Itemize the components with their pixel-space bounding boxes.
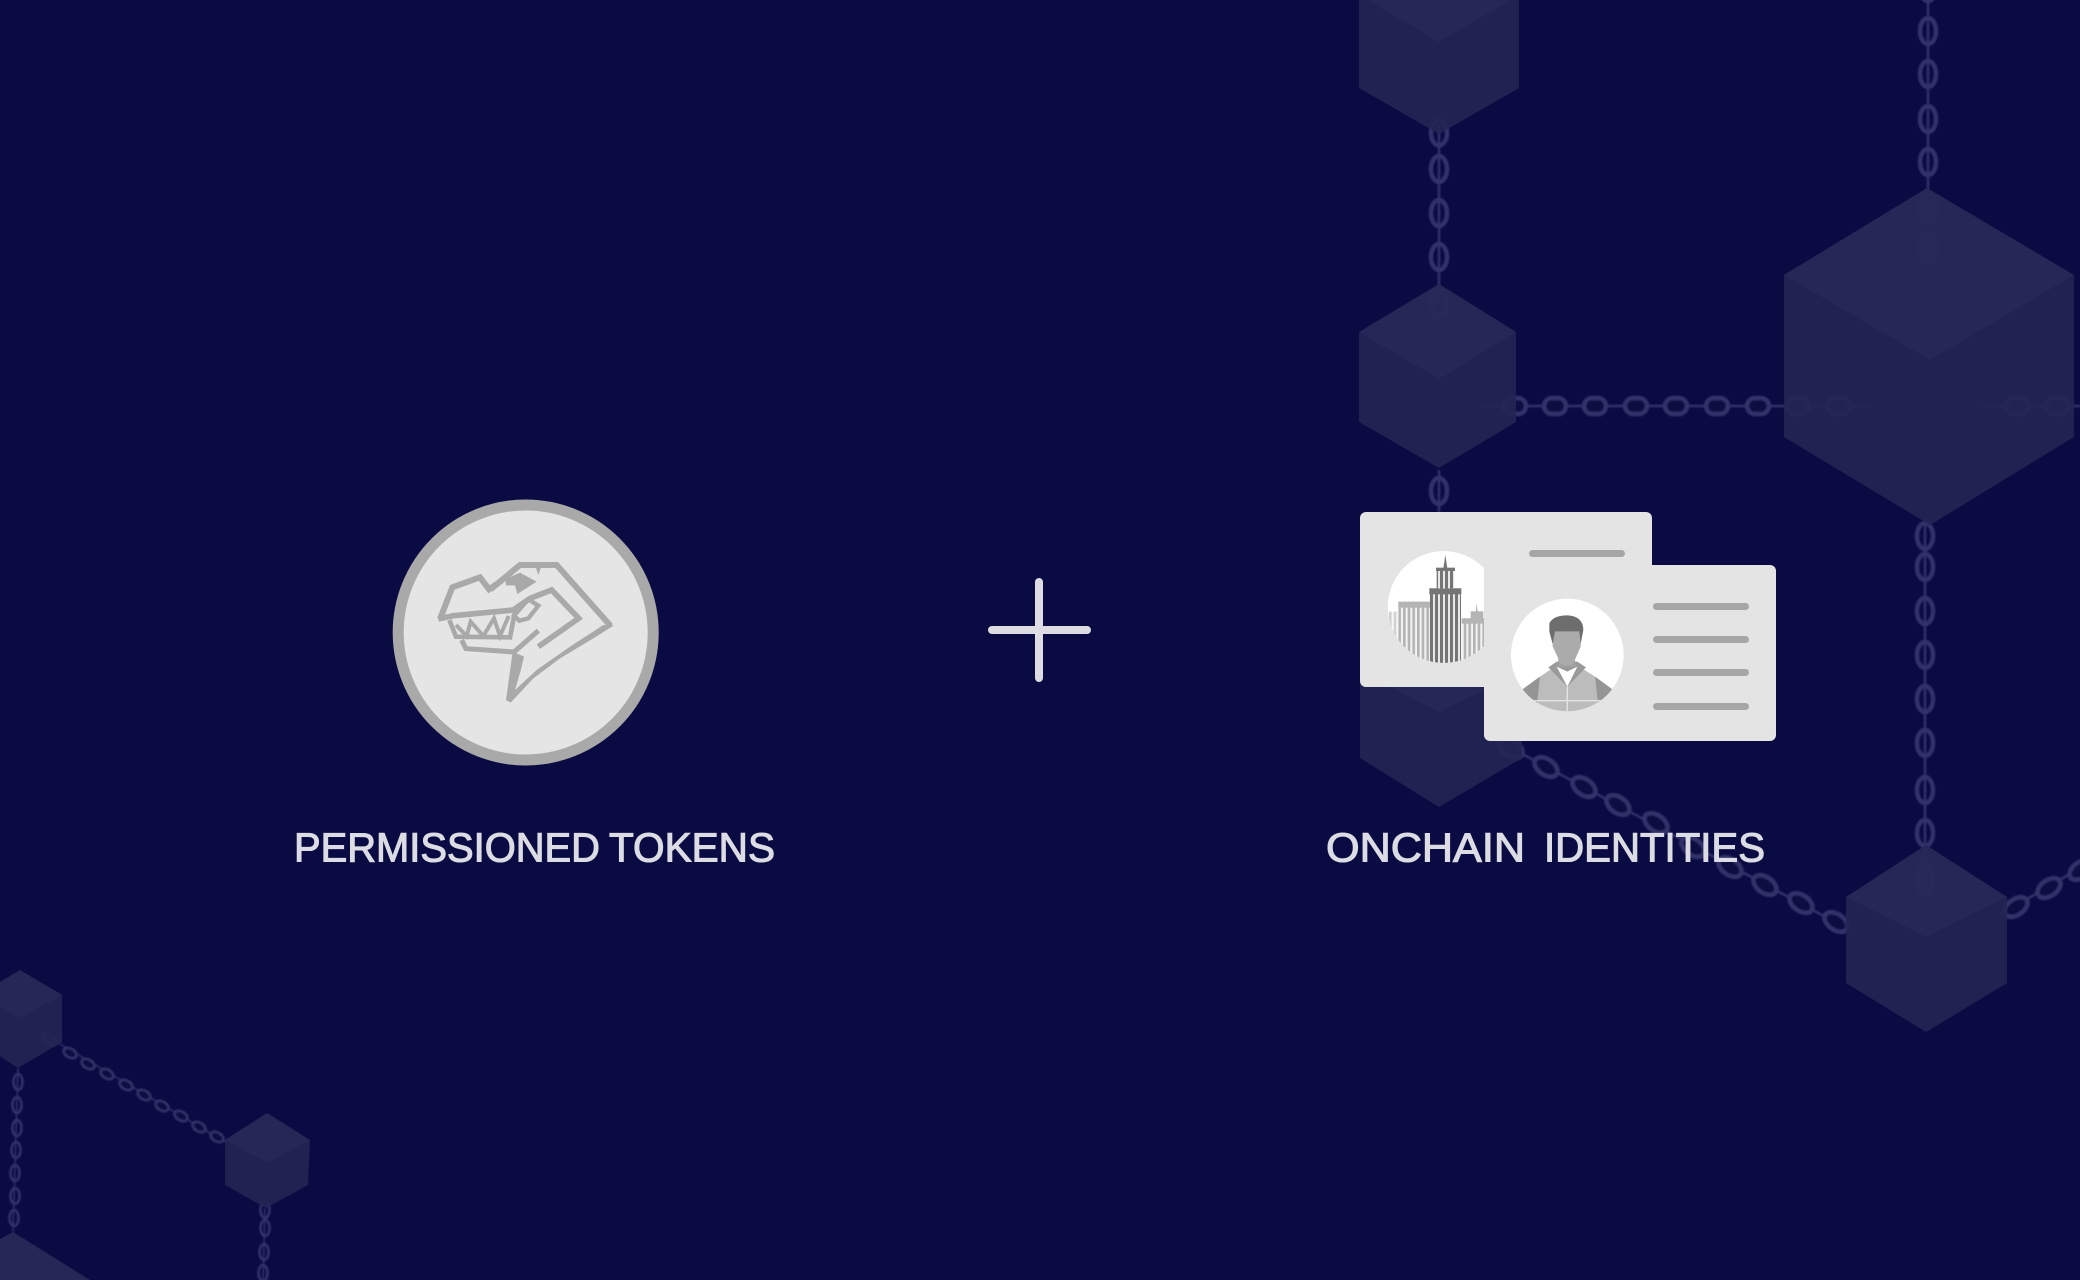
block: large right — [1784, 188, 2074, 525]
icon: city skyline — [1388, 551, 1484, 663]
label: permissioned tokens: PERMISSIONED — [294, 824, 600, 870]
plus sign — [992, 582, 1087, 678]
label: onchain identities: IDENTITIES — [1544, 824, 1765, 870]
detail lines — [1653, 603, 1749, 710]
block: lower left small — [225, 1113, 310, 1208]
token coin — [398, 505, 653, 760]
card: organisation — [1360, 512, 1652, 687]
background chains: top right — [1431, 0, 2080, 512]
label: onchain identities: ONCHAIN — [1326, 824, 1525, 870]
icon: t-rex logo — [438, 565, 614, 703]
block: behind cards — [1360, 620, 1522, 807]
icon: person avatar — [1511, 599, 1624, 717]
label: permissioned tokens: TOKENS — [609, 824, 775, 870]
block: second left — [1359, 284, 1516, 468]
block: top — [1359, 0, 1519, 134]
block: bottom left corner — [0, 1232, 90, 1280]
title line — [1529, 550, 1625, 557]
coin disc — [398, 505, 653, 760]
block: lower right — [1846, 845, 2007, 1032]
block: lower left cut off — [0, 970, 62, 1068]
card: person — [1484, 565, 1776, 741]
identity cards — [1360, 512, 1776, 741]
background chains: right vertical and diagonals — [1496, 520, 2080, 936]
background chains: lower left — [10, 1032, 270, 1280]
